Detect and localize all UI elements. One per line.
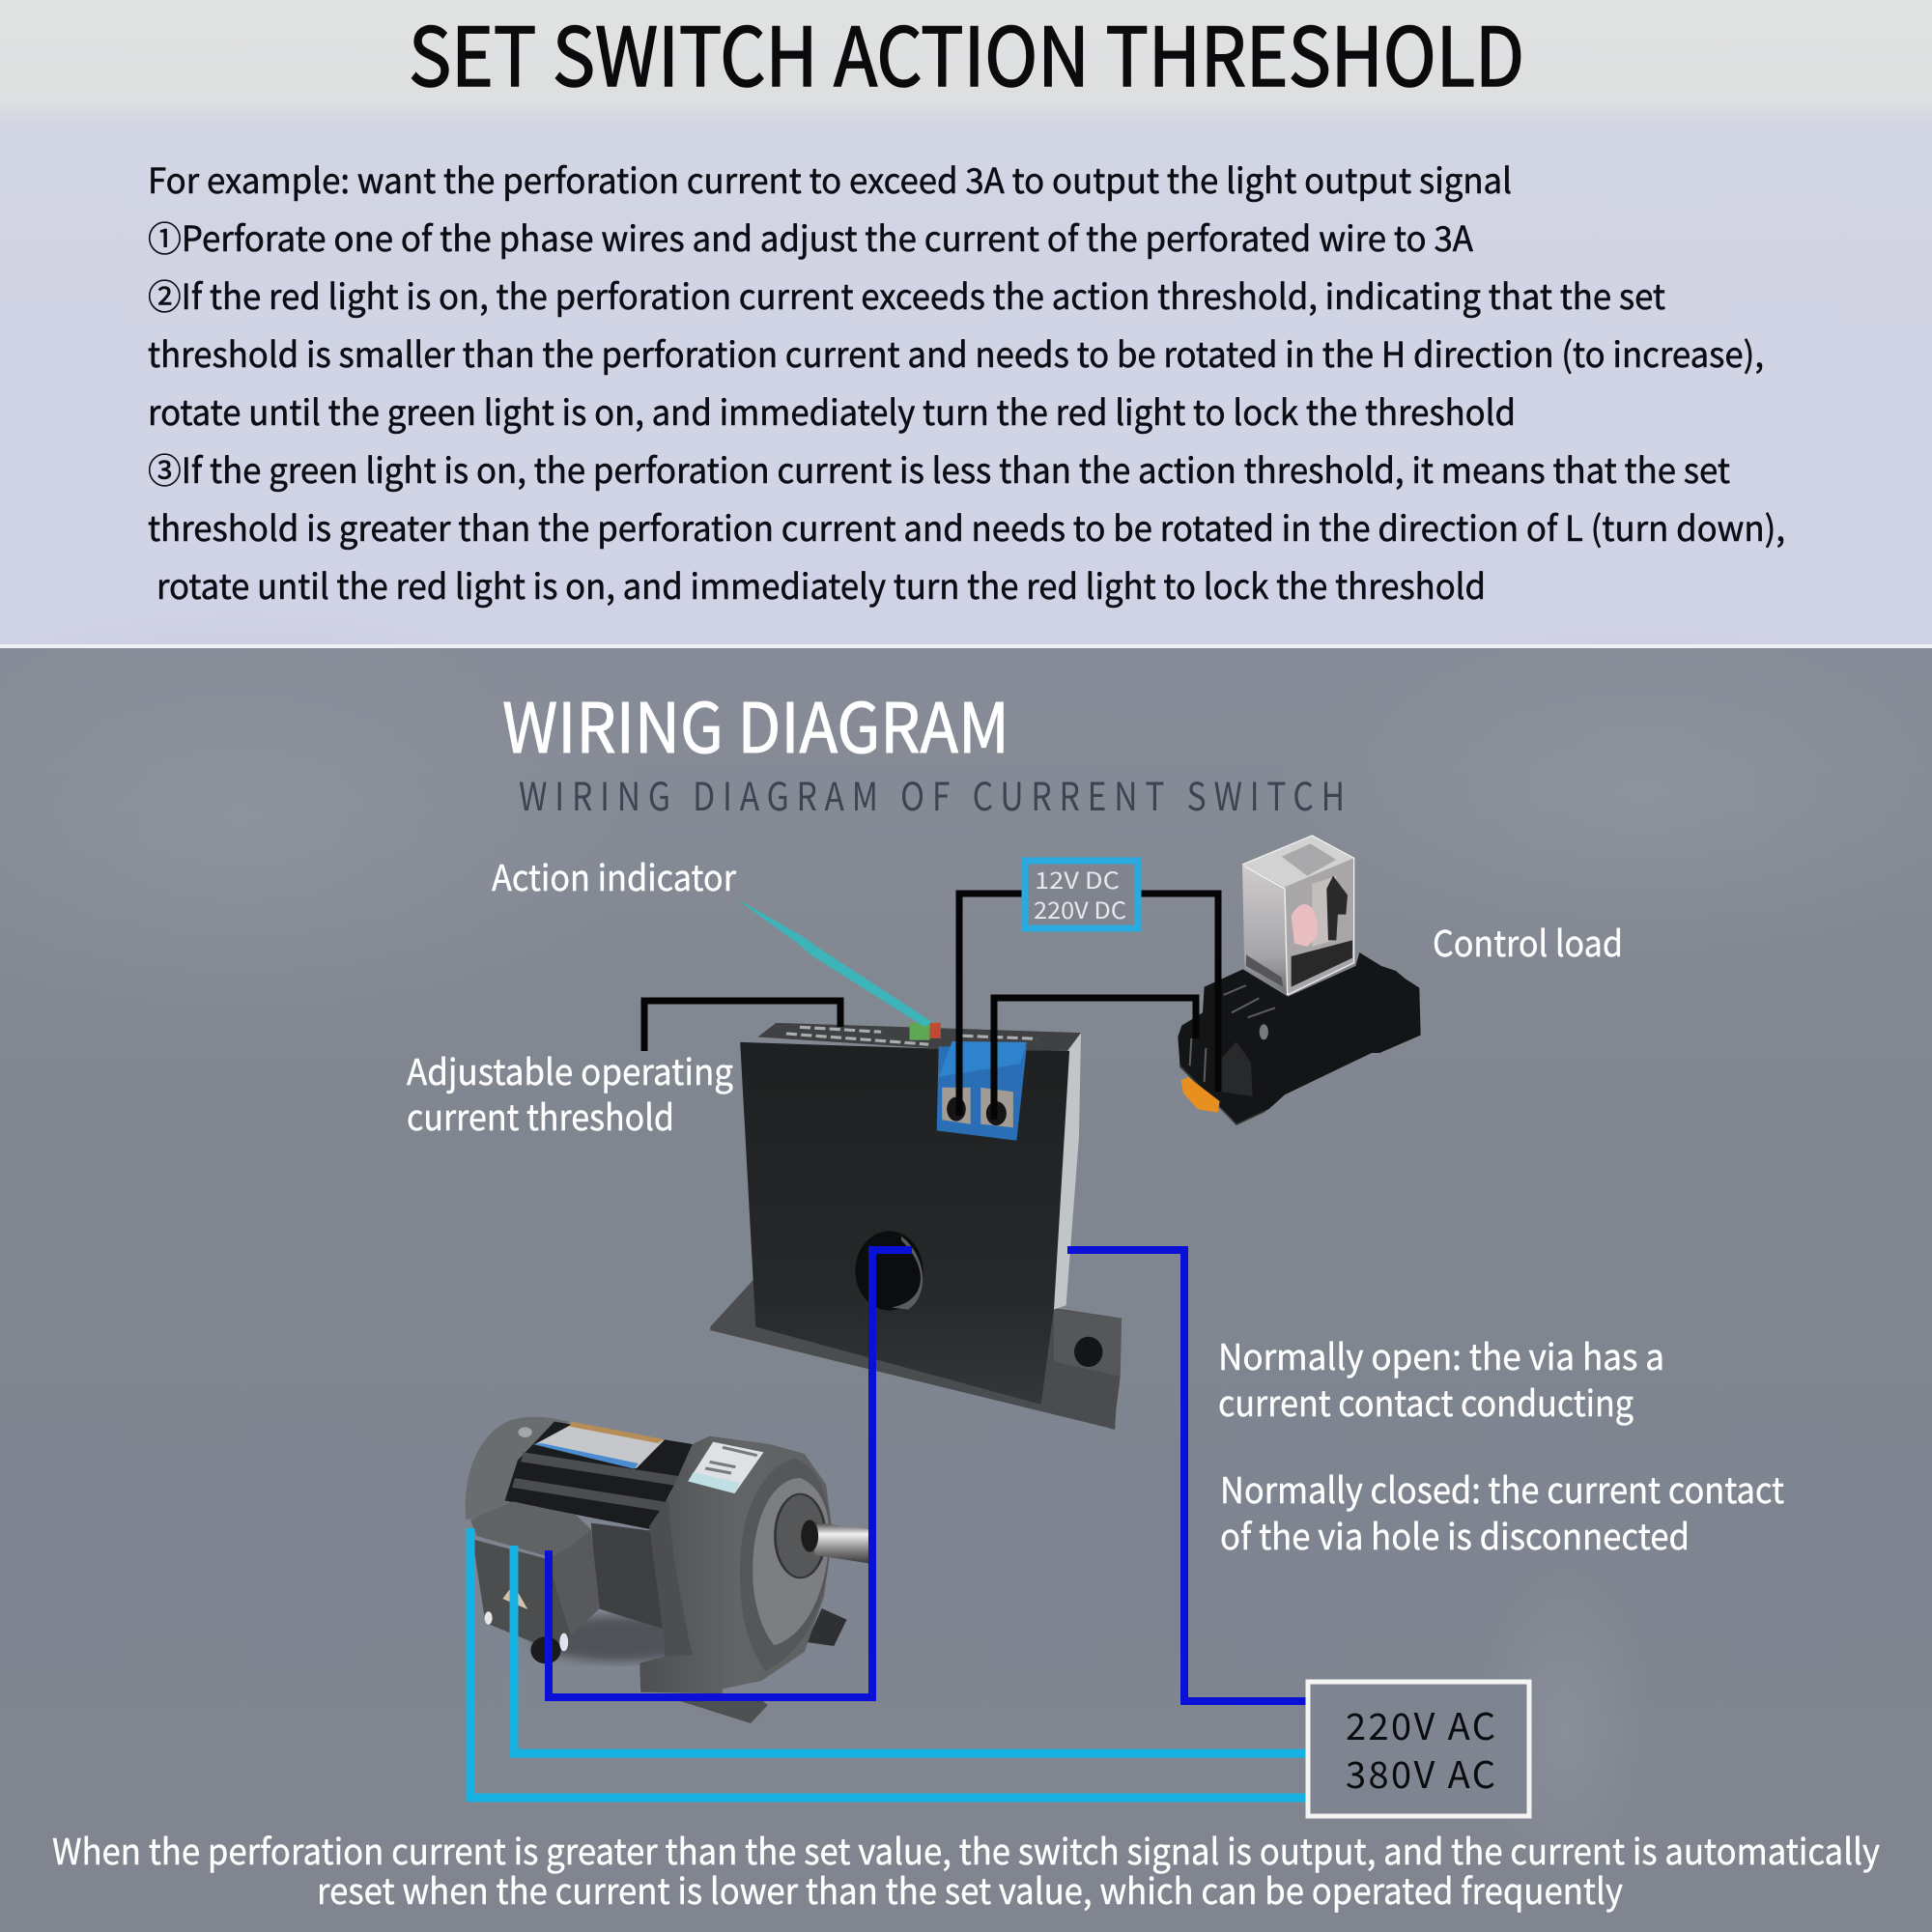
label: normally closed: of the via hole is disconnected	[1220, 1508, 1690, 1560]
label: normally closed	[1220, 1462, 1784, 1560]
current switch device	[710, 1023, 1122, 1430]
relay clear cover	[1242, 836, 1354, 995]
label: action indicator: Action indicator	[492, 849, 737, 901]
wires: cyan supply wires	[470, 1528, 1309, 1798]
label: power supply box: 380V AC	[1346, 1746, 1495, 1799]
text block: threshold instructions: ①Perforate one of the phase wires and adjust the current of the perforated wire to 3A	[148, 212, 1473, 262]
motor rear foot	[677, 1693, 768, 1723]
text block: threshold instructions: threshold is smaller than the perforation current and needs to be rotated in the H direction (to increase),	[148, 327, 1764, 378]
label: adjustable threshold: current threshold	[407, 1089, 674, 1141]
relay latch	[1181, 1077, 1220, 1113]
motor side	[591, 1523, 665, 1630]
relay: control load	[1178, 836, 1421, 1124]
text block: threshold instructions: ②If the red light is on, the perforation current exceeds the action threshold, indicating that the set	[148, 270, 1665, 320]
text block: threshold instructions: rotate until the green light is on, and immediately turn the red light to lock the threshold	[148, 385, 1516, 436]
motor shadow	[533, 1616, 705, 1662]
relay socket	[1178, 952, 1421, 1124]
wires: black control wires	[644, 894, 1218, 1120]
label: normally closed: Normally closed: the current contact	[1220, 1462, 1784, 1514]
panel: instructions background	[0, 0, 1932, 645]
text block: threshold instructions: threshold is greater than the perforation current and needs to be rotated in the direction of L (turn down),	[148, 501, 1785, 552]
label: adjustable threshold: Adjustable operating	[407, 1043, 733, 1095]
motor gearbox	[639, 1436, 833, 1693]
label: 12V DC 220V DC box: 12V DC	[1035, 862, 1120, 895]
motor finned body	[505, 1422, 693, 1529]
arrow: action indicator pointer	[738, 900, 932, 1027]
label: normally open: current contact conducting	[1218, 1375, 1634, 1427]
label: power supply box: 220V AC	[1346, 1697, 1495, 1750]
switch top face	[757, 1023, 1081, 1051]
motor right foot	[807, 1608, 847, 1646]
label: adjustable threshold	[407, 1043, 733, 1141]
subheading: WIRING DIAGRAM OF CURRENT SWITCH	[519, 765, 1345, 822]
heading: wiring diagram: WIRING DIAGRAM	[502, 674, 1009, 773]
label: 12V DC 220V DC box	[1025, 861, 1138, 928]
text block: threshold instructions: ③If the green light is on, the perforation current is less than the action threshold, it means that the set	[148, 443, 1730, 494]
label: power supply box	[1308, 1682, 1529, 1816]
text block: bottom note: reset when the current is lower than the set value, which can be operated frequently	[317, 1862, 1623, 1915]
action indicator LED	[910, 1023, 941, 1040]
blue wiring terminal	[937, 1041, 1027, 1141]
motor shaft	[801, 1520, 869, 1563]
label: control load: Control load	[1433, 915, 1623, 967]
panel: wiring diagram background	[0, 609, 1932, 1932]
wires: blue phase wires	[549, 1250, 1309, 1701]
motor terminal box	[470, 1501, 600, 1663]
label: 12V DC 220V DC box: 220V DC	[1034, 892, 1126, 925]
motor nameplate	[688, 1442, 763, 1493]
switch base plate	[710, 1277, 1122, 1430]
motor rear cap	[466, 1417, 570, 1520]
text block: threshold instructions: rotate until the red light is on, and immediately turn the red light to lock the threshold	[156, 559, 1486, 610]
label: normally open: Normally open: the via has a	[1218, 1328, 1664, 1380]
label: normally open	[1218, 1328, 1664, 1427]
text block: threshold instructions: For example: want the perforation current to exceed 3A to output the light output signal	[148, 154, 1512, 204]
switch side strip	[1054, 1033, 1081, 1310]
text block: threshold instructions	[148, 154, 1785, 610]
through hole	[855, 1231, 923, 1311]
text block: bottom note	[52, 1823, 1880, 1915]
switch front face	[740, 1042, 1069, 1405]
motor	[466, 1417, 869, 1723]
